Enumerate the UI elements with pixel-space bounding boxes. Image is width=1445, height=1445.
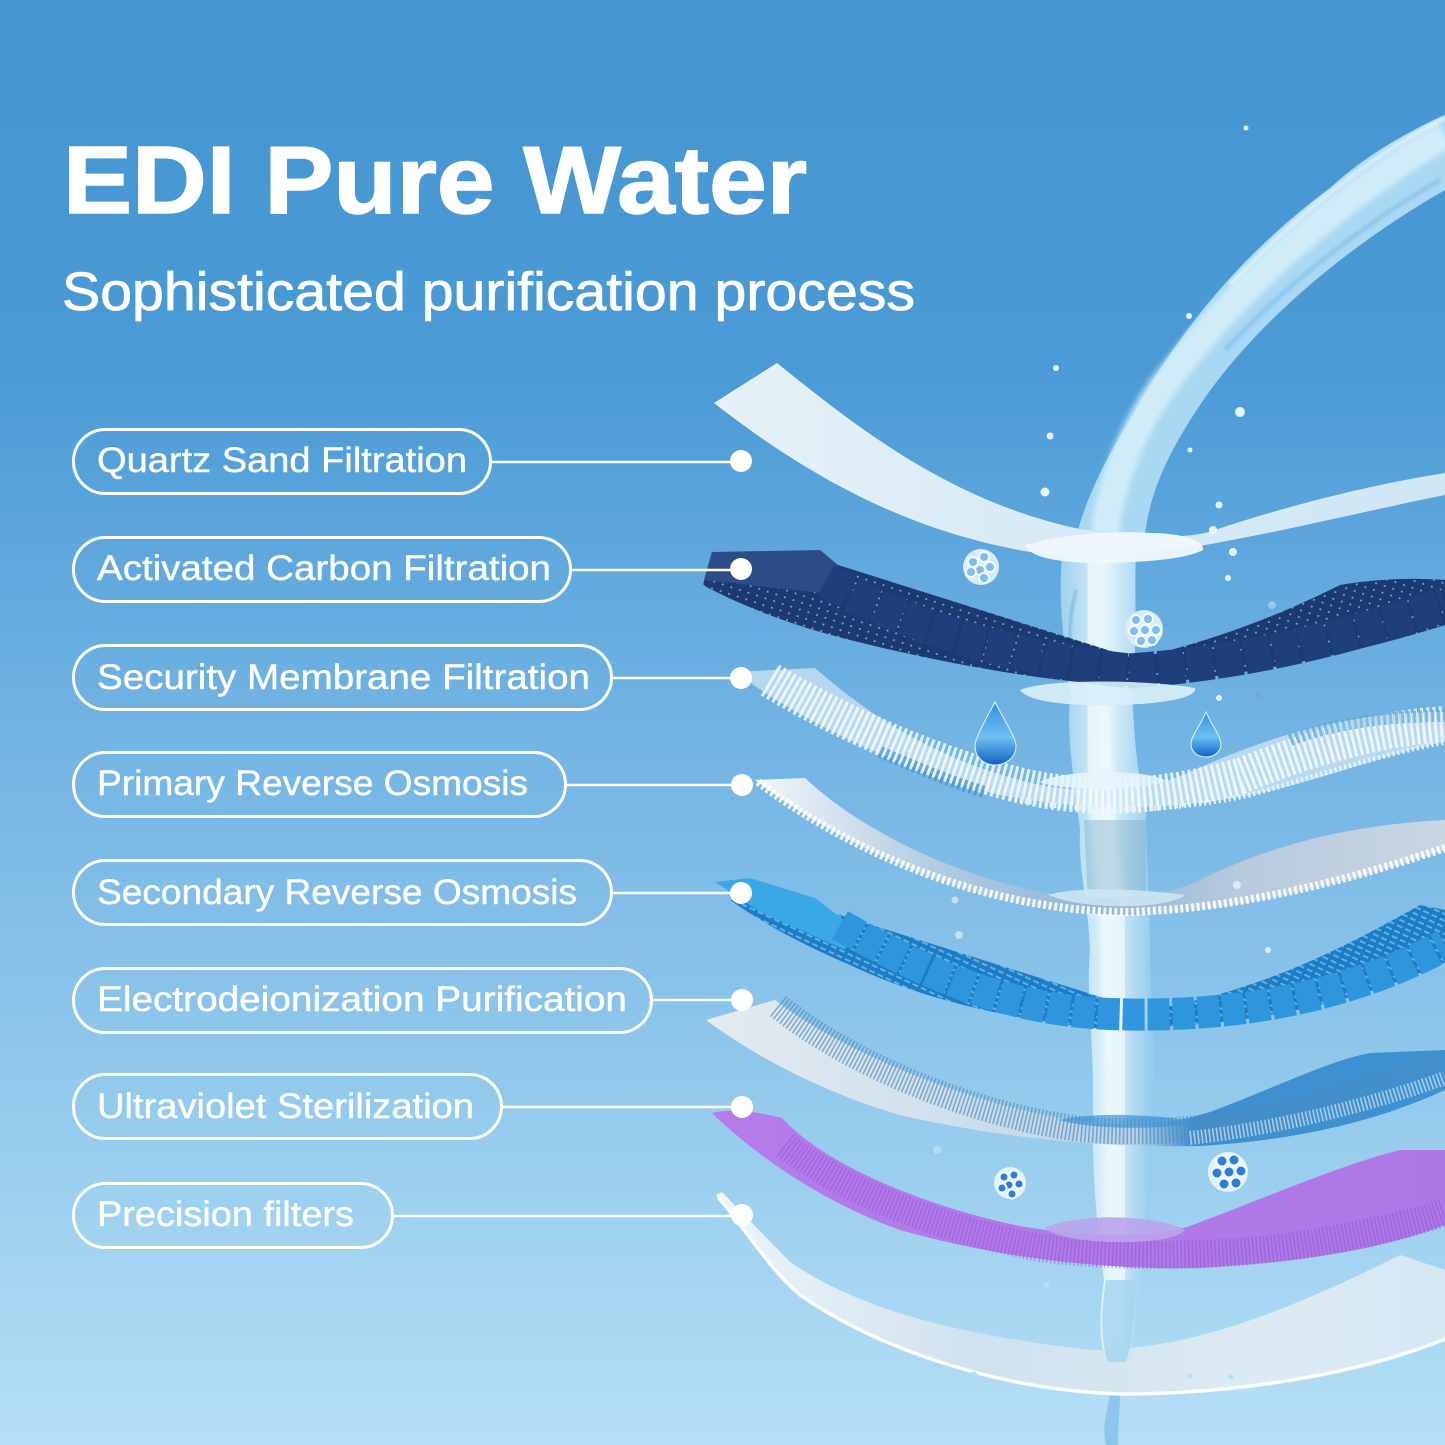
label 1: quartz sand filtration — [74, 430, 752, 494]
label 4: primary reverse osmosis — [74, 752, 753, 816]
label 8: precision filters — [74, 1184, 753, 1248]
layer 4: primary reverse osmosis — [755, 778, 1445, 915]
layer 5: secondary reverse osmosis blue block — [715, 878, 1445, 1030]
icon: particle cluster lower right — [1208, 1152, 1248, 1192]
label 6: electrodeionization purification — [74, 968, 753, 1032]
label 6: electrodeionization purification: Electrodeionization Purification — [97, 980, 627, 1019]
layer 2: activated carbon block — [703, 550, 1445, 686]
icon: large water drop — [975, 702, 1016, 765]
layer 6: electrodeionization comb — [706, 1000, 1445, 1146]
layer 3: security membrane — [735, 668, 1445, 809]
subtitle: Sophisticated purification process — [62, 262, 915, 322]
label 7: ultraviolet sterilization: Ultraviolet Sterilization — [97, 1087, 474, 1126]
label 7: ultraviolet sterilization — [74, 1074, 753, 1138]
label 4: primary reverse osmosis: Primary Reverse Osmosis — [97, 764, 528, 803]
water arc: top stream — [1078, 115, 1445, 535]
water column — [1061, 555, 1153, 1445]
icon: particle cluster upper right — [1125, 610, 1163, 648]
label 8: precision filters: Precision filters — [97, 1195, 354, 1234]
water droplets — [933, 126, 1276, 1392]
label 3: security membrane filtration — [74, 646, 752, 710]
layer 1: quartz sand ribbon — [714, 363, 1445, 563]
icon: particle cluster lower left — [994, 1167, 1026, 1199]
label 5: secondary reverse osmosis: Secondary Reverse Osmosis — [97, 873, 577, 912]
icon: particle cluster upper left — [963, 549, 999, 585]
icon: small water drop — [1191, 712, 1221, 757]
label 5: secondary reverse osmosis — [74, 860, 752, 924]
label 3: security membrane filtration: Security Membrane Filtration — [97, 658, 590, 697]
title: EDI Pure Water — [63, 127, 807, 234]
label 1: quartz sand filtration: Quartz Sand Filtration — [97, 441, 467, 480]
layer 7: ultraviolet purple band — [712, 1111, 1445, 1268]
splash under carbon layer — [1020, 682, 1195, 705]
layer 8: precision filter white band — [716, 1192, 1445, 1395]
label 2: activated carbon filtration — [74, 538, 752, 602]
water stream tip through bottom layer — [1102, 1280, 1138, 1362]
label 2: activated carbon filtration: Activated Carbon Filtration — [97, 549, 551, 588]
